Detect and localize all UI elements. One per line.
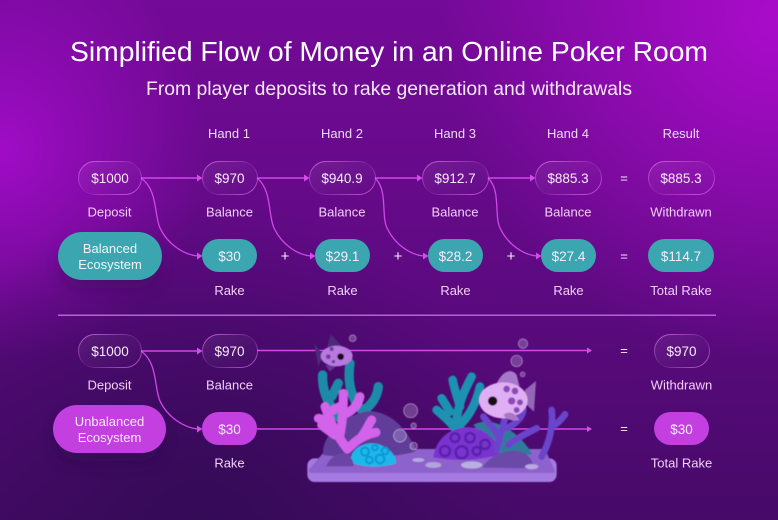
- balanced operators: =: [620, 170, 628, 186]
- indigo coral: [483, 408, 565, 457]
- unbalanced operators: =: [620, 343, 628, 358]
- balanced values: $27.4: [552, 249, 586, 264]
- unbalanced values: $970: [666, 344, 697, 359]
- balanced operators: +: [507, 248, 516, 265]
- balanced operators: +: [394, 248, 403, 265]
- balanced values: $1000: [91, 171, 129, 186]
- arrowheads: balanced flow: [197, 174, 542, 260]
- unbalanced values: [91, 344, 697, 437]
- teal coral left: [323, 363, 378, 418]
- column headers: [208, 126, 700, 141]
- column headers: Result: [663, 126, 700, 141]
- teal coral right: [437, 377, 480, 433]
- arrowheads: unbalanced flow: [197, 348, 592, 432]
- grey rock: [323, 411, 416, 457]
- balanced values: $885.3: [547, 171, 589, 186]
- subtitle: From player deposits to rake generation and withdrawals: [146, 78, 632, 100]
- teal rock right: [473, 422, 533, 458]
- illustration: coral reef: [307, 334, 565, 482]
- balanced labels: Total Rake: [650, 283, 712, 298]
- balanced labels: Rake: [327, 283, 358, 298]
- balanced values: $30: [218, 249, 241, 264]
- unbalanced balance pills: [78, 334, 710, 368]
- unbalanced values: $1000: [91, 344, 129, 359]
- balanced labels: Deposit: [87, 204, 132, 220]
- balanced ecosystem badge: [58, 232, 162, 288]
- arrows: balanced flow: [141, 178, 537, 256]
- unbalanced values: $30: [670, 422, 693, 437]
- balanced values: $28.2: [439, 249, 472, 264]
- balanced operators: [281, 170, 628, 265]
- small rock: [326, 453, 354, 466]
- pink coral: [318, 393, 376, 449]
- reef base: [307, 449, 557, 482]
- balanced values: $885.3: [660, 171, 702, 186]
- unbalanced ecosystem badge: Unbalanced: [75, 414, 144, 429]
- unbalanced ecosystem badge: Ecosystem: [78, 430, 141, 445]
- unbalanced values: $970: [214, 344, 245, 359]
- purple brain coral: [433, 427, 499, 460]
- balanced labels: Rake: [214, 283, 245, 298]
- balanced labels: Balance: [319, 204, 365, 220]
- balanced labels: Rake: [553, 283, 584, 298]
- column headers: Hand 1: [208, 126, 250, 141]
- unbalanced values: $30: [218, 422, 241, 437]
- column headers: Hand 3: [434, 126, 476, 141]
- balanced values: $970: [214, 171, 245, 186]
- unbalanced operators: [620, 343, 628, 436]
- divider: [58, 314, 716, 316]
- balanced values: $29.1: [326, 249, 359, 264]
- balanced balance row pills: [78, 162, 714, 194]
- unbalanced labels: Total Rake: [651, 456, 712, 470]
- balanced labels: [87, 204, 712, 298]
- balanced values: $940.9: [321, 171, 363, 186]
- unbalanced operators: =: [620, 421, 628, 436]
- unbalanced labels: [87, 378, 712, 470]
- unbalanced labels: Rake: [214, 456, 245, 470]
- balanced labels: Balance: [432, 204, 478, 220]
- balanced operators: =: [620, 248, 628, 264]
- balanced rake row pills: [202, 239, 714, 272]
- bubbles: [349, 335, 528, 450]
- column headers: Hand 2: [321, 126, 363, 141]
- balanced labels: Rake: [440, 283, 471, 298]
- left fish: [314, 334, 353, 372]
- balanced ecosystem badge: Ecosystem: [78, 257, 142, 272]
- cyan brain coral: [351, 443, 396, 467]
- stones and rock: [412, 451, 538, 469]
- balanced values: $912.7: [434, 171, 476, 186]
- unbalanced labels: Deposit: [87, 378, 132, 392]
- balanced values: $114.7: [661, 249, 701, 264]
- right fish: [479, 371, 536, 421]
- unbalanced ecosystem badge: [53, 405, 166, 461]
- balanced values: [91, 171, 702, 264]
- balanced labels: Balance: [545, 204, 591, 220]
- arrows: unbalanced flow: [141, 350, 588, 429]
- balanced labels: Withdrawn: [650, 204, 712, 220]
- balanced operators: +: [281, 248, 290, 265]
- unbalanced labels: Withdrawn: [651, 378, 712, 392]
- unbalanced labels: Balance: [206, 378, 253, 392]
- column headers: Hand 4: [547, 126, 589, 141]
- balanced labels: Balance: [206, 204, 253, 220]
- unbalanced rake pills: [202, 412, 709, 445]
- title: Simplified Flow of Money in an Online Poker Room: [70, 36, 708, 67]
- balanced ecosystem badge: Balanced: [83, 241, 137, 256]
